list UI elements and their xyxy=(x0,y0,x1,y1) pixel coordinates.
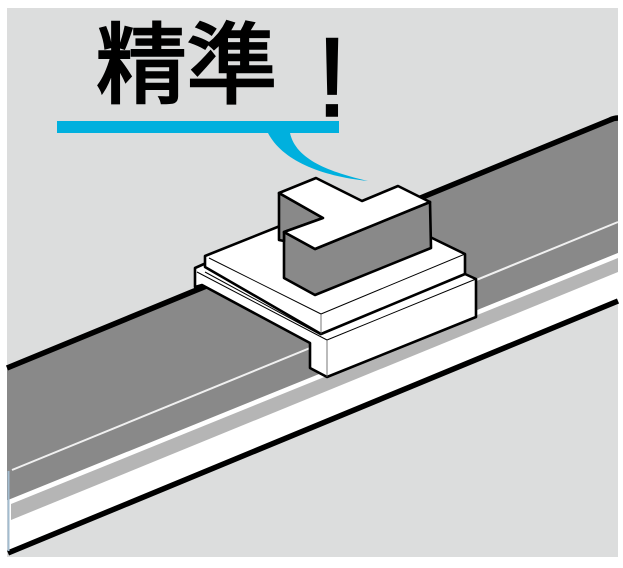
exclamation mark: ! xyxy=(316,15,348,140)
upper plate top edges xyxy=(209,254,465,314)
blue callout bar xyxy=(57,121,339,133)
blue callout leader xyxy=(268,133,368,181)
block white T top xyxy=(279,178,430,249)
carriage xyxy=(195,178,476,377)
rail dark top surface xyxy=(7,118,618,500)
block gray faces xyxy=(284,202,431,295)
lower carriage detail lines xyxy=(197,272,476,340)
rail bottom black edge xyxy=(8,301,618,553)
rail highlight line xyxy=(12,222,618,470)
rail top black edge xyxy=(7,118,618,368)
rail left edge xyxy=(8,471,10,551)
lower carriage corner line xyxy=(326,340,328,377)
upper plate xyxy=(205,226,465,334)
lower carriage body xyxy=(195,264,476,377)
upper plate corner line xyxy=(320,314,322,334)
block left gray face xyxy=(279,193,323,241)
rail white side xyxy=(8,253,618,553)
rail xyxy=(7,118,618,553)
rail light gray stripe xyxy=(11,258,618,520)
title: 精準 xyxy=(96,16,277,115)
plate shadow line xyxy=(205,272,321,335)
